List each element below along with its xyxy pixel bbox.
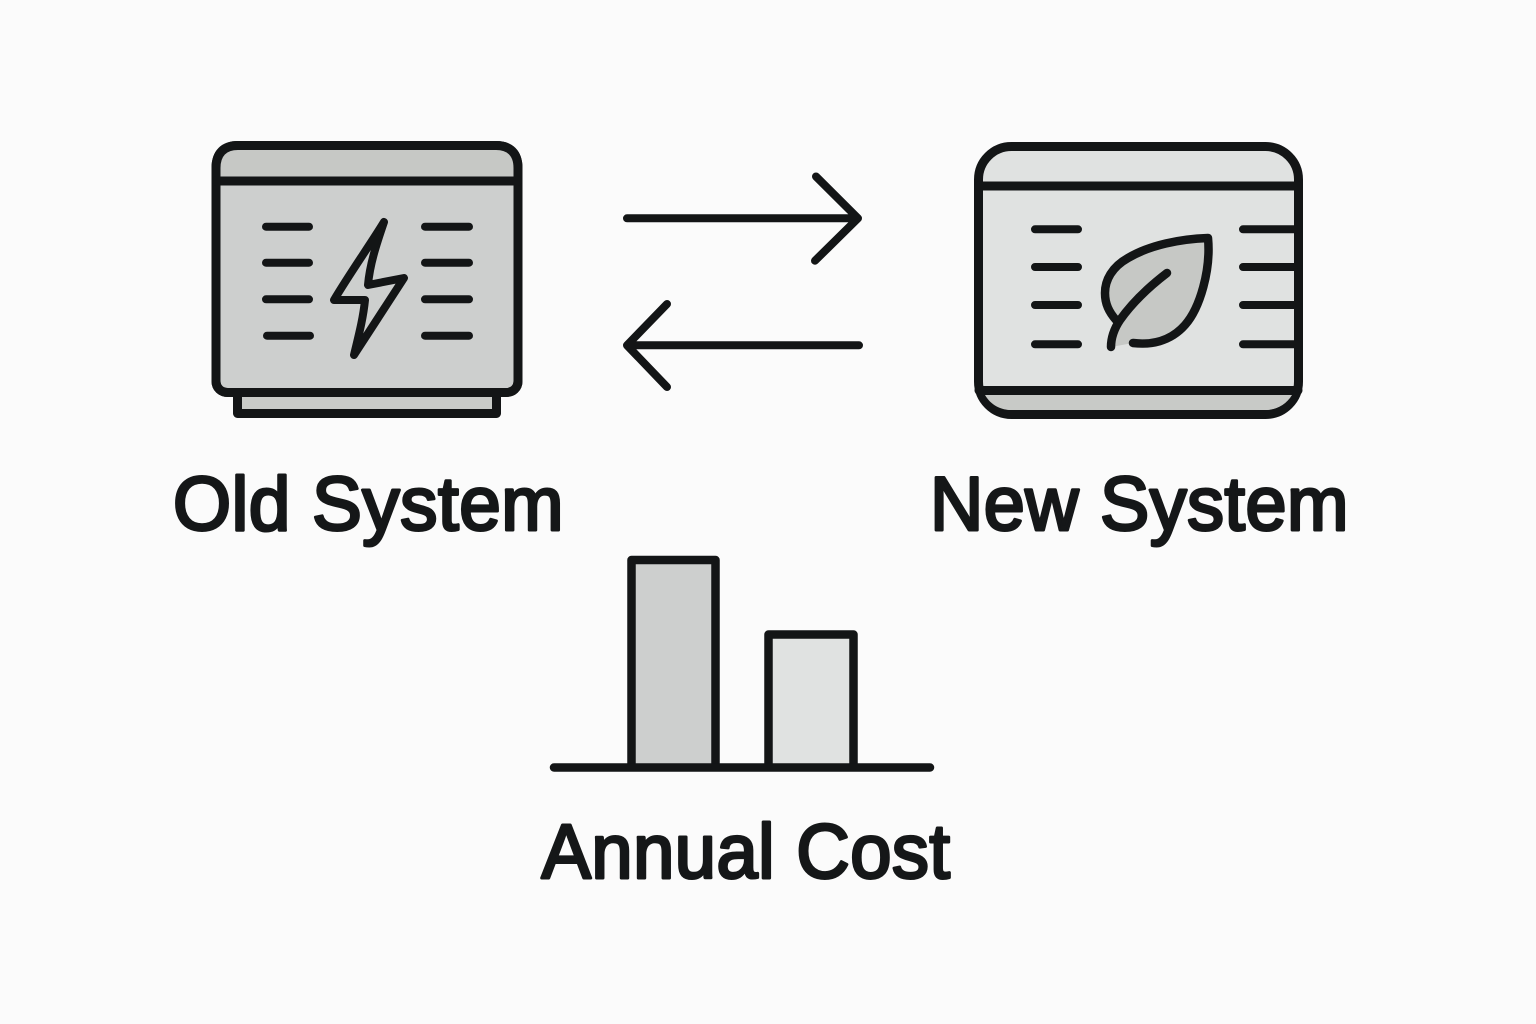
bar: old system cost bbox=[632, 560, 716, 768]
arrow: old to new bbox=[627, 176, 858, 261]
icon: old system unit bbox=[216, 146, 518, 414]
bar: new system cost bbox=[768, 634, 854, 768]
label: new system: New System bbox=[930, 462, 1349, 547]
label: old system: Old System bbox=[173, 462, 564, 547]
icon: leaf bbox=[1105, 238, 1208, 347]
bar chart: annual cost bbox=[554, 560, 930, 768]
arrow: new to old bbox=[627, 304, 859, 387]
icon: new system unit bbox=[978, 146, 1298, 414]
icon: lightning bolt bbox=[334, 222, 404, 355]
label: annual cost: Annual Cost bbox=[542, 809, 950, 895]
